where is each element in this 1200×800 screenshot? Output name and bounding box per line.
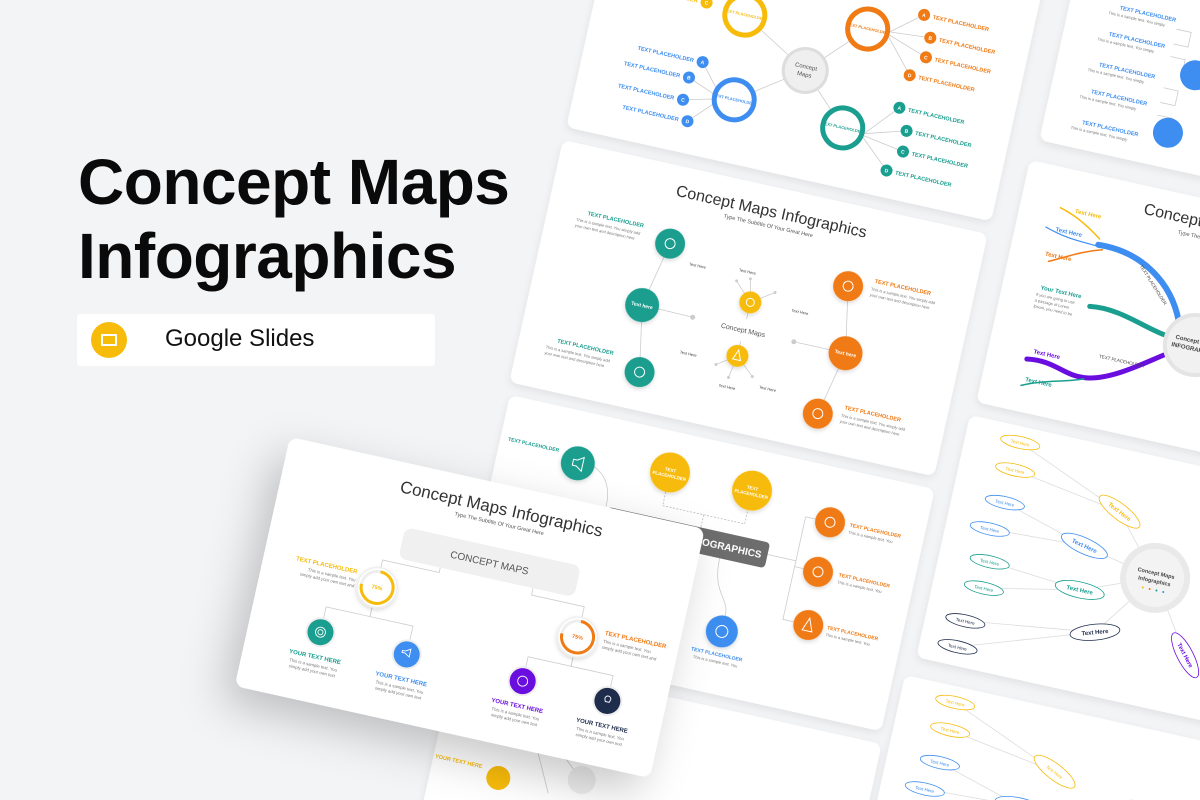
slide: concept map teal/orange nodes: Text Here <box>759 384 777 393</box>
badge label: Google Slides <box>165 325 314 352</box>
slide: middle gray bar concept map: TEXT PLACEHOLDER <box>826 625 879 642</box>
slide: right column mind map with curves: If you are going to use <box>1036 292 1076 305</box>
slide: middle gray bar concept map: PLACEHOLDER <box>734 488 769 500</box>
slide: concept map teal/orange nodes: Text Here <box>679 349 698 358</box>
slide: concept map teal/orange nodes: Text Here <box>739 267 757 276</box>
slide: right column ellipse mind map <box>916 415 1200 751</box>
slide: right column mind map with curves: Text Here <box>1044 252 1072 263</box>
slide: concept map teal/orange nodes: Text Here <box>718 383 737 391</box>
slide: concept map teal/orange nodes: your own text and description here <box>869 292 931 310</box>
slide: right column ellipse mind map: Text Here <box>1005 466 1025 475</box>
slide: right column icons list <box>1039 0 1200 234</box>
slide: right column mind map with curves: Text Here <box>1055 227 1083 239</box>
rings <box>702 0 892 152</box>
center node <box>779 44 831 97</box>
slide: right column ellipse mind map: Text Here <box>1107 502 1132 523</box>
slide: right column mind map with curves: Ipsum, you need to be <box>1033 303 1073 317</box>
front slide: concept maps tree: This is a sample text. You <box>491 706 540 722</box>
front slide: concept maps tree: 75% <box>571 634 583 642</box>
slide: top concept map with rings: TEXT PLACEHOLDER <box>724 8 766 22</box>
progress rings <box>353 564 401 611</box>
slide: concept map teal/orange nodes: This is a sample text. You simply add <box>576 217 641 236</box>
slide: right column ellipse mind map: Infographics <box>1137 575 1171 588</box>
front slide: concept maps tree: YOUR TEXT HERE <box>288 649 341 666</box>
slide: concept map teal/orange nodes <box>509 140 988 476</box>
center circle <box>1159 309 1200 381</box>
slide: middle gray bar concept map: This is a sample text. You <box>693 654 738 669</box>
letter nodes: A <box>700 60 705 66</box>
slide: right column icons list: TEXT PLACEHOLDER <box>1119 5 1176 24</box>
slide: bottom partly hidden <box>403 650 882 800</box>
slide: top concept map with rings: TEXT PLACEHOLDER <box>915 131 972 149</box>
slide: right column ellipse mind map: Text Here <box>1175 642 1193 670</box>
slide: concept map teal/orange nodes: Text here <box>834 349 857 360</box>
letter nodes: D <box>685 119 690 126</box>
concept maps box: CONCEPT MAPS <box>449 550 530 578</box>
slide: middle gray bar concept map: TEXT PLACEHOLDER <box>849 523 902 540</box>
slide: concept map teal/orange nodes: your own text and description here <box>839 419 901 437</box>
slide: right column icons list: This is a sample text. You simply <box>1079 94 1137 111</box>
text labels <box>294 556 669 650</box>
slide: top concept map with rings <box>566 0 1045 221</box>
icon: google slides <box>91 322 127 358</box>
front slide: concept maps tree: simply add your own text and <box>299 571 355 589</box>
slide: top concept map with rings: TEXT PLACEHOLDER <box>932 15 989 33</box>
concept maps box <box>398 527 581 597</box>
slide: right column ellipse mind map: Text Here <box>1070 538 1098 555</box>
letter nodes: C <box>704 0 709 7</box>
slide title: Type The Subtitle Of Your Great Here <box>723 214 813 239</box>
letter nodes <box>670 0 942 181</box>
slide: top concept map with rings: TEXT PLACEHOLDER <box>847 22 889 36</box>
slide: right column icons list: TEXT PLACEHOLDER <box>1098 62 1156 81</box>
slide: middle gray bar concept map: This is a sample text. You <box>837 579 882 594</box>
front slide: concept maps tree: This is a sample text. You <box>307 567 357 583</box>
slide: right column ellipse mind map: Text Here <box>1066 585 1094 597</box>
slide: top concept map with rings: TEXT PLACEHOLDER <box>938 38 996 56</box>
slide: bottom partly hidden: YOUR TEXT HERE <box>434 754 483 770</box>
front slide: concept maps tree: simply add your own text <box>575 732 623 747</box>
text blocks: TEXT PLACEHOLDER <box>557 339 614 357</box>
slide: top concept map with rings: TEXT PLACEHOLDER <box>907 108 965 126</box>
letter nodes: B <box>904 129 909 135</box>
letter nodes: C <box>923 55 929 62</box>
slide: middle gray bar concept map: TEXT PLACEHOLDER <box>691 646 743 664</box>
slide: middle gray bar concept map: PLACEHOLDER <box>652 470 687 482</box>
text blocks: TEXT PLACEHOLDER <box>587 211 644 229</box>
front slide: concept maps tree: This is a sample text. You <box>603 639 652 654</box>
front slide: concept maps tree: YOUR TEXT HERE <box>491 698 543 715</box>
slide: right column ellipse mind map: Text Here <box>947 643 968 652</box>
curves <box>1011 206 1197 416</box>
slide: right column icons list: This is a sample text. You simply <box>1087 67 1145 84</box>
slide: bottom right ellipse mind map: Text Here <box>945 698 966 708</box>
slide: middle gray bar concept map <box>456 395 935 731</box>
slide: right column icons list: TEXT PLACEHOLDER <box>1108 32 1166 50</box>
slide: right column mind map with curves: Text Here <box>1033 349 1061 361</box>
slide: middle gray bar concept map: TEXT PLACEHOLDER <box>507 437 560 454</box>
slide: top concept map with rings: TEXT PLACEHOLDER <box>617 83 675 102</box>
text blocks <box>556 211 932 424</box>
letter nodes: B <box>686 75 692 82</box>
slide: right column ellipse mind map: Text Here <box>980 558 1000 567</box>
letter nodes: C <box>680 97 686 104</box>
front slide: concept maps tree: This is a sample text. You <box>289 657 338 673</box>
letter nodes: D <box>907 73 912 80</box>
front slide: concept maps tree: simply add your own text and <box>601 645 657 662</box>
slide: middle gray bar concept map: This is a sample text. You <box>848 530 893 544</box>
slide: right column mind map with curves: TEXT PLACEHOLDER <box>1139 264 1168 306</box>
slide: concept map teal/orange nodes: This is a sample text. You simply add <box>871 286 936 305</box>
slide: top concept map with rings: TEXT PLACEHOLDER <box>713 92 755 106</box>
slide: top concept map with rings: TEXT PLACEHOLDER <box>623 61 681 79</box>
google slides badge <box>77 314 435 366</box>
main title: Concept Maps <box>78 146 509 218</box>
concept maps label: Concept Maps <box>720 323 766 339</box>
center node: Concept <box>794 62 818 73</box>
front slide: concept maps tree <box>235 437 705 778</box>
front slide: concept maps tree: This is a sample text. You <box>576 726 625 742</box>
slide: right column ellipse mind map: Text Here <box>1081 629 1109 637</box>
text labels: TEXT PLACEHOLDER <box>604 631 667 650</box>
slide: middle gray bar concept map: TEXT <box>746 485 759 492</box>
letter nodes: A <box>921 13 927 19</box>
text blocks: TEXT PLACEHOLDER <box>874 279 931 297</box>
child icons <box>303 616 625 718</box>
slide: bottom right ellipse mind map: Text Here <box>940 726 960 735</box>
slide: right column mind map with curves <box>976 160 1200 496</box>
slide title: Concept Maps Infographics <box>674 183 868 242</box>
letter nodes: A <box>897 105 902 112</box>
front title: Type The Subtitle Of Your Great Here <box>454 512 544 537</box>
slide: top concept map with rings: TEXT PLACEHOLDER <box>637 46 694 64</box>
slide: right column ellipse mind map: Concept Maps <box>1137 567 1175 581</box>
slide: right column mind map with curves: a passage of Lorem <box>1034 297 1071 310</box>
text labels: TEXT PLACEHOLDER <box>295 556 359 576</box>
slide: top concept map with rings: TEXT PLACEHOLDER <box>934 57 991 76</box>
slide: concept map teal/orange nodes: Text Here <box>791 308 810 316</box>
slide: right column mind map with curves: Text Here <box>1025 377 1053 389</box>
slide: middle gray bar concept map: This is a sample text. You <box>825 632 870 647</box>
front slide: concept maps tree: This is a sample text. You <box>375 679 424 695</box>
main title <box>78 146 509 292</box>
letter nodes: D <box>884 168 889 175</box>
front slide: concept maps tree: simply add your own text <box>375 685 423 701</box>
slide: bottom right ellipse mind map <box>851 675 1200 800</box>
slide: concept map teal/orange nodes: your own text and description here <box>574 223 636 241</box>
slide: right column ellipse mind map: Text Here <box>1010 438 1031 448</box>
slide: bottom right ellipse mind map: Text Here <box>1045 764 1064 780</box>
slide: right column icons list: This is a sample text. You simply <box>1108 10 1166 28</box>
slide: right column mind map with curves: Your Text Here <box>1040 285 1083 300</box>
gray bar <box>602 507 770 568</box>
slide: bottom right ellipse mind map: Text Here <box>930 759 950 768</box>
front slide: concept maps tree: simply add your own text <box>288 663 336 679</box>
slide: right column mind map with curves: Text Here <box>1074 209 1102 221</box>
slide: right column icons list: This is a sample text. You simply <box>1097 36 1155 54</box>
nodes <box>608 222 880 435</box>
gray bar: CONCEPT INFOGRAPHICS <box>635 523 763 561</box>
progress rings: 75% <box>371 584 383 593</box>
slide: middle gray bar concept map: TEXT PLACEHOLDER <box>838 573 891 590</box>
slide: concept map teal/orange nodes: Text Here <box>689 261 707 270</box>
slide: right column ellipse mind map: Text Here <box>955 617 976 626</box>
slide: right column icons list: This is a sample text. You simply <box>1070 125 1128 142</box>
slide: top concept map with rings: TEXT PLACEHOLDER <box>894 170 952 189</box>
slide: concept map teal/orange nodes: Text here <box>631 301 653 311</box>
slide: right column icons list: TEXT PLACEHOLDER <box>1090 89 1148 108</box>
slide: right column ellipse mind map: Text Here <box>974 584 994 593</box>
slide: top concept map with rings: TEXT PLACEHOLDER <box>822 121 864 134</box>
slide: concept map teal/orange nodes: This is a sample text. You simply add <box>840 413 906 432</box>
front slide: concept maps tree: YOUR TEXT HERE <box>375 671 427 688</box>
slide: top concept map with rings: TEXT PLACEHOLDER <box>622 105 679 123</box>
front slide: concept maps tree: simply add your own text <box>490 712 539 727</box>
front slide: concept maps tree: YOUR TEXT HERE <box>575 718 628 735</box>
slide: top concept map with rings: TEXT PLACEHOLDER <box>911 152 968 170</box>
text blocks: TEXT PLACEHOLDER <box>844 405 901 424</box>
front title: Concept Maps Infographics <box>398 477 605 541</box>
slide: right column icons list: TEXT PLACEHOLDER <box>1081 120 1139 138</box>
slide: concept map teal/orange nodes: your own text and description here <box>544 350 606 368</box>
main title: Infographics <box>78 220 456 292</box>
slide: right column ellipse mind map: Text Here <box>980 525 1000 534</box>
slide: top concept map with rings: TEXT PLACEHOLDER <box>918 75 975 94</box>
slide: right column mind map with curves: TEXT PLACEHOLDER <box>1099 354 1146 369</box>
slide: right column ellipse mind map: Text Here <box>995 499 1015 508</box>
slide: middle gray bar concept map: TEXT <box>664 466 677 474</box>
center node: Maps <box>796 71 812 80</box>
slide: bottom right ellipse mind map: Text Here <box>915 785 935 794</box>
letter nodes: B <box>928 35 933 42</box>
slide: concept map teal/orange nodes: This is a sample text. You simply add <box>545 344 610 363</box>
letter nodes: C <box>900 149 906 156</box>
